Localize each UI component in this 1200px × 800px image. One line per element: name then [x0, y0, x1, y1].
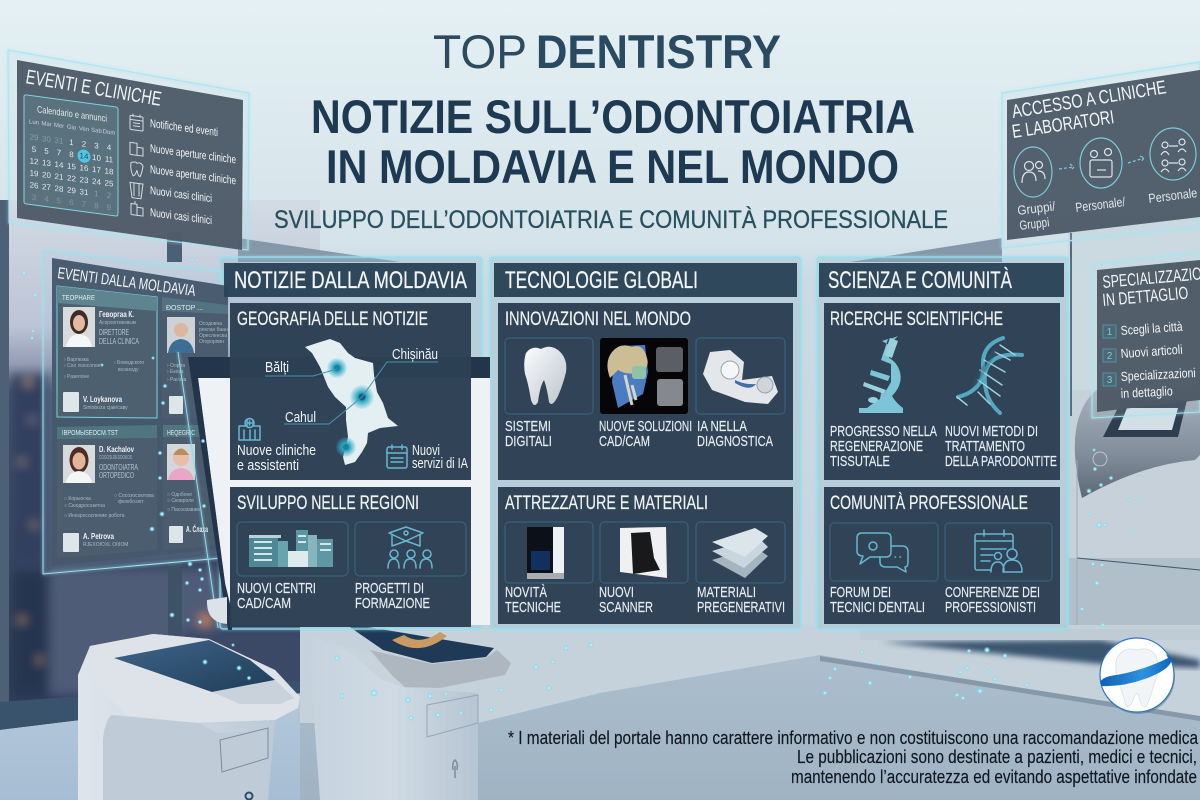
card: nuovi centri cad/cam — [237, 522, 348, 612]
map: moldova: Cahul — [285, 410, 316, 426]
title: TOP DENTISTRY — [433, 25, 781, 78]
calendar: 28 — [55, 184, 64, 194]
card: second doctor: ÐOSTOP ... — [166, 305, 203, 312]
background: ceiling beams — [238, 238, 1002, 262]
sub-panel: sviluppo nelle regioni — [230, 487, 471, 627]
panel: eventi e cliniche — [8, 50, 249, 250]
card: fourth doctor: ○ Пасоозавам — [167, 507, 200, 513]
calendar: 13 — [42, 158, 51, 168]
calendar: 6 — [69, 198, 74, 207]
calendar: 29 — [30, 132, 39, 143]
calendar: 5 — [57, 196, 62, 206]
column header: notizie dalla moldavia: NOTIZIE DALLA MOLDAVIA — [234, 267, 467, 294]
heading: accesso — [1010, 77, 1168, 143]
heading: eventi dalla moldavia: EVENTI DALLA MOLDAVIA — [56, 265, 197, 300]
calendar: 16 — [80, 163, 89, 173]
calendar: 7 — [57, 148, 62, 158]
sub-panel: geografia delle notizie: GEOGRAFIA DELLE NOTIZIE — [237, 309, 428, 330]
card: fourth doctor — [163, 425, 228, 550]
calendar: Sab — [91, 128, 102, 135]
calendar: 3 — [32, 193, 37, 202]
map: moldova — [265, 339, 438, 465]
sub-panel: comunita professionale: COMUNITÀ PROFESSIONALE — [830, 493, 1028, 514]
calendar: 25 — [105, 178, 114, 189]
card: odontoiatra ortopedico: IBPOMЫSEOCM.TST — [62, 428, 118, 437]
title: TOP DENTISTRY: TOP — [433, 25, 527, 78]
sub-panel: innovazioni nel mondo: INNOVAZIONI NEL MONDO — [505, 309, 691, 330]
card: materiali pregenerativi: MATERIALI — [697, 585, 756, 601]
panel: eventi dalla moldavia — [43, 250, 228, 574]
calendar: 19 — [30, 168, 39, 179]
text: nuovi metodi di trattamento — [945, 424, 1057, 470]
list: steps — [1103, 319, 1196, 401]
column header: tecnologie globali: TECNOLOGIE GLOBALI — [505, 267, 698, 294]
card: odontoiatra ortopedico: ○ Корыоска — [64, 496, 91, 502]
card: fourth doctor: A. Ćлаха — [186, 525, 208, 534]
text: nuovi servizi di IA: Nuovi — [412, 443, 440, 459]
calendar: Lun — [29, 119, 39, 127]
card: nuovi centri cad/cam: NUOVI CENTRI — [237, 581, 316, 597]
list: notifications: Nuovi casi clinici — [150, 207, 212, 227]
map: moldova: Bălți — [265, 360, 289, 376]
calendar: 20 — [42, 170, 51, 180]
calendar: 1 — [69, 138, 74, 147]
footer disclaimer — [508, 728, 1199, 787]
card: sistemi digitali: SISTEMI — [505, 419, 551, 435]
card: ia nella diagnostica: DIAGNOSTICA — [697, 434, 773, 450]
card: clinic director: Асорооггежевым — [99, 320, 137, 326]
heading: eventi e cliniche: EVENTI E CLINICHE — [24, 66, 163, 111]
card: forum dei tecnici: TECNICI DENTALI — [830, 600, 925, 616]
calendar: 12 — [30, 156, 39, 167]
text: progresso nella regenerazione tissutale: PROGRESSO NELLA — [830, 424, 937, 440]
list: notifications — [130, 113, 236, 230]
card: sistemi digitali: DIGITALI — [505, 434, 552, 450]
heading: main headline: IN MOLDAVIA E NEL MONDO — [326, 140, 899, 193]
list: steps: Nuovi articoli — [1120, 342, 1183, 361]
card: second doctor: реклан баан — [199, 327, 228, 333]
list: steps: Scegli la città — [1120, 319, 1184, 338]
card: odontoiatra ortopedico: ORTOPEDICO — [99, 471, 134, 480]
card: odontoiatra ortopedico: RJEXOIOXL OIIIOM — [83, 542, 128, 548]
calendar: 22 — [67, 173, 76, 184]
calendar: 2 — [107, 191, 112, 200]
calendar: 3 — [94, 141, 99, 151]
card: second doctor — [162, 297, 228, 418]
calendar: 5 — [44, 146, 49, 156]
card: second doctor: › Оорпа — [167, 363, 185, 369]
panel: notizie dalla moldavia — [224, 263, 476, 627]
card: materiali pregenerativi — [696, 522, 785, 616]
calendar: 17 — [92, 165, 101, 175]
text: nuovi metodi di trattamento: DELLA PARODONTITE — [945, 454, 1057, 470]
column header: scienza e comunita: SCIENZA E COMUNITÀ — [828, 267, 1012, 294]
labels: access flow — [1017, 185, 1198, 233]
calendar: Gio — [67, 124, 77, 132]
machine: left scanner unit — [78, 634, 300, 800]
card: second doctor: › Екоза — [167, 369, 184, 375]
list: steps: in dettaglio — [1120, 383, 1173, 401]
subtitle: SVILUPPO DELL’ODONTOIATRIA E COMUNITÀ PROFESSIONALE — [274, 205, 948, 234]
photo: woman portrait — [63, 445, 95, 483]
calendar: 15 — [67, 161, 76, 172]
icon: clinic — [239, 418, 260, 440]
list: steps: 1 — [1107, 327, 1113, 338]
list: notifications: Notifiche ed eventi — [150, 118, 218, 139]
card: nuovi centri cad/cam: CAD/CAM — [237, 596, 291, 612]
card: conferenze dei professionisti — [945, 523, 1052, 616]
calendar: 18 — [105, 166, 114, 177]
card: odontoiatra ortopedico: A. Petrova — [83, 531, 114, 541]
calendar: 1 — [94, 189, 99, 199]
text: progresso nella regenerazione tissutale: REGENERAZIONE — [830, 439, 923, 455]
calendar: 9 — [107, 203, 112, 212]
text: nuovi metodi di trattamento: TRATTAMENTO — [945, 439, 1025, 455]
card: nuove soluzioni cad/cam — [599, 338, 692, 450]
panel: scienza e comunita — [819, 263, 1064, 624]
icon: dna — [957, 338, 1022, 413]
calendar — [24, 95, 118, 216]
list: notifications: Nuove aperture cliniche — [150, 143, 236, 166]
calendar: Mer — [54, 123, 64, 130]
card: second doctor: Оресленска — [199, 333, 227, 339]
card: second doctor: Огорорпин — [199, 339, 224, 345]
column header: notizie dalla moldavia — [224, 263, 476, 297]
card: second doctor: Осодовна — [199, 321, 222, 327]
text: nuove cliniche e assistenti: Nuove cliniche — [237, 443, 316, 459]
logo: tooth with blue swoosh — [1100, 638, 1175, 714]
heading: main headline — [311, 90, 915, 193]
card: materiali pregenerativi: PREGENERATIVI — [697, 600, 785, 616]
labels: access flow: Gruppi — [1019, 214, 1050, 233]
background: right-hand clinic machines — [1068, 215, 1200, 640]
calendar: 10 — [92, 153, 101, 163]
card: nuovi scanner: SCANNER — [599, 600, 653, 616]
card: clinic director: DIRETTORE — [99, 328, 129, 337]
text: nuovi metodi di trattamento: NUOVI METODI DI — [945, 424, 1038, 440]
photo: woman portrait — [63, 307, 95, 347]
sub-panel: attrezzature e materiali: ATTREZZATURE E MATERIALI — [505, 493, 708, 514]
calendar: 29 — [67, 185, 76, 196]
card: odontoiatra ortopedico: COGOSLRESOOKOS — [99, 455, 132, 461]
calendar: 27 — [42, 182, 51, 192]
labels: access flow: Gruppi/ — [1017, 198, 1056, 218]
title: TOP DENTISTRY: DENTISTRY — [536, 25, 781, 78]
sub-panel: ricerche scientifiche — [824, 303, 1060, 480]
labels: access flow: Personale/ — [1075, 194, 1126, 215]
calendar: 7 — [82, 199, 87, 209]
card: nuove soluzioni cad/cam: NUOVE SOLUZIONI — [599, 419, 692, 435]
calendar: Calendario e annunci — [37, 104, 107, 125]
calendar: 4 — [44, 194, 49, 204]
calendar: 26 — [30, 180, 39, 191]
calendar: 21 — [55, 172, 64, 182]
card: fourth doctor: HEQEGRIC — [167, 428, 195, 437]
card: progetti di formazione: FORMAZIONE — [355, 596, 430, 612]
calendar: 23 — [80, 175, 89, 185]
panel: accesso a cliniche e laboratori — [1002, 62, 1200, 248]
list: steps: 2 — [1107, 351, 1113, 362]
text: nuovi servizi di IA: servizi di IA — [412, 456, 468, 472]
list: steps: 3 — [1107, 375, 1113, 386]
calendar: Mar — [41, 121, 52, 128]
card: odontoiatra ortopedico: D. Kachalov — [99, 444, 134, 454]
glow frames around the three main columns — [220, 257, 1068, 629]
sub-panel: sviluppo nelle regioni: SVILUPPO NELLE REGIONI — [237, 493, 419, 514]
card: progetti di formazione — [355, 522, 466, 612]
text: nuovi servizi di IA — [412, 443, 468, 472]
particles: glowing dots — [22, 258, 1140, 721]
text: progresso nella regenerazione tissutale — [830, 424, 937, 470]
card: odontoiatra ortopedico: ○ Инoзрососпение робота — [64, 513, 125, 519]
card: clinic director: › Бомодского — [114, 360, 144, 366]
calendar: Ven — [79, 126, 89, 133]
monitor overlapping the side panel — [178, 352, 490, 630]
calendar: 24 — [92, 177, 101, 187]
machine: central scanner unit — [310, 623, 511, 800]
diagram: access flow — [1014, 128, 1196, 197]
list: notifications: Nuovi casi clinici — [150, 185, 212, 205]
card: forum dei tecnici: FORUM DEI — [830, 585, 891, 601]
icon: calendar — [387, 445, 407, 468]
text: nuove cliniche e assistenti: e assistenti — [237, 458, 299, 474]
card: nuove soluzioni cad/cam: CAD/CAM — [599, 434, 650, 450]
calendar: 31 — [80, 187, 89, 197]
card: clinic director: TEOPHARE — [62, 293, 95, 302]
card: clinic director — [57, 286, 157, 418]
calendar: 11 — [105, 154, 114, 165]
heading: specializzazioni — [1102, 262, 1200, 310]
heading: accesso: E LABORATORI — [1011, 107, 1116, 143]
card: clinic director: › Разелоне — [64, 374, 89, 380]
card: progetti di formazione: PROGETTI DI — [355, 581, 424, 597]
card: odontoiatra ortopedico: фкокбоэют — [118, 499, 144, 505]
card: clinic director: Sintoboza cjaвrсаву — [83, 405, 128, 411]
card: clinic director: Геворгаа К. — [99, 309, 134, 319]
sub-panel: ricerche scientifiche: RICERCHE SCIENTIFICHE — [830, 309, 1003, 330]
icon: microscope — [859, 336, 903, 413]
card: clinic director: › Варпезка — [64, 357, 89, 363]
card: ia nella diagnostica — [696, 338, 785, 450]
list: notifications: Nuove aperture cliniche — [150, 164, 236, 187]
card: second doctor: › Расоза — [167, 377, 187, 383]
sub-panel: comunita professionale — [824, 487, 1060, 624]
card: novita tecniche: TECNICHE — [505, 600, 561, 616]
map: moldova: Chișinău — [392, 347, 438, 363]
calendar: 4 — [107, 143, 112, 152]
calendar: 2 — [82, 139, 87, 149]
card: novita tecniche: NOVITÀ — [505, 584, 547, 601]
card: clinic director: V. Loykanova — [83, 394, 122, 404]
card: clinic director: › Соо лсюсопое — [64, 363, 101, 369]
calendar: 14 — [55, 160, 64, 170]
calendar: 31 — [55, 136, 64, 146]
card: conferenze dei professionisti: PROFESSIONISTI — [945, 600, 1036, 616]
text: progresso nella regenerazione tissutale: TISSUTALE — [830, 454, 890, 470]
calendar: 30 — [42, 134, 51, 144]
card: fourth doctor: ○ Сковроле — [167, 498, 194, 504]
calendar: 8 — [69, 150, 74, 159]
card: conferenze dei professionisti: CONFERENZE DEI — [945, 585, 1040, 601]
card: forum dei tecnici — [830, 523, 938, 616]
calendar: 5 — [32, 145, 37, 154]
card: ia nella diagnostica: IA NELLA — [697, 419, 747, 435]
text: nuove cliniche e assistenti — [237, 443, 316, 474]
sub-panel: innovazioni nel mondo — [498, 303, 793, 480]
card: fourth doctor: ○ Однбоне — [167, 492, 192, 498]
card: odontoiatra ortopedico: ODONTOIATRA — [99, 463, 138, 472]
calendar: 8 — [94, 201, 99, 211]
panel: specializzazioni in dettaglio — [1092, 252, 1200, 418]
card: novita tecniche — [505, 522, 593, 616]
panel: tecnologie globali — [494, 263, 797, 624]
card: clinic director: DELLA CLINICA — [99, 337, 139, 346]
card: odontoiatra ortopedico: ○ Сосозосоклова — [114, 493, 154, 499]
sub-panel: attrezzature e materiali — [498, 487, 793, 624]
calendar: 14 — [80, 151, 89, 161]
card: sistemi digitali — [505, 338, 593, 450]
background: floor and counter — [0, 625, 1200, 800]
heading: main headline: NOTIZIE SULL’ODONTOIATRIA — [311, 90, 915, 143]
card: clinic director: всокзоду — [118, 367, 139, 373]
background: city window — [0, 200, 320, 730]
column header: tecnologie globali — [494, 263, 797, 297]
card: odontoiatra ortopedico: ○ Сюодросозетна — [64, 503, 105, 509]
card: nuovi scanner: NUOVI — [599, 585, 634, 601]
calendar: Dom — [103, 129, 115, 137]
sub-panel: geografia delle notizie — [230, 303, 471, 480]
card: odontoiatra ortopedico — [57, 425, 157, 558]
card: nuovi scanner — [599, 522, 688, 616]
